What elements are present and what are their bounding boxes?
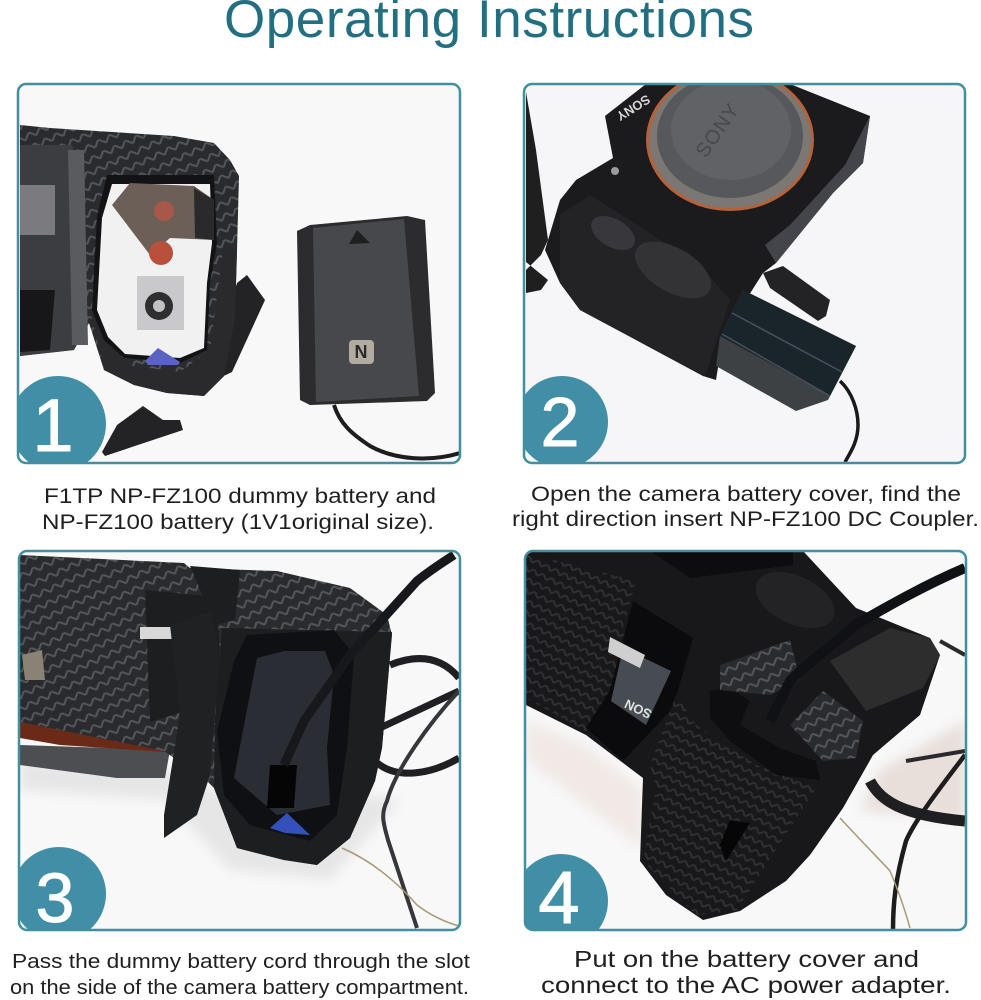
number badge 1 bbox=[19, 376, 106, 462]
cord bbox=[840, 381, 858, 462]
cord bbox=[770, 568, 965, 721]
strap bbox=[526, 92, 548, 293]
number badge 2: 2 bbox=[541, 383, 579, 461]
caption 1: F1TP NP-FZ100 dummy battery and bbox=[44, 485, 436, 508]
camera body bbox=[526, 551, 940, 920]
camera body bbox=[20, 555, 392, 865]
caption 2: right direction insert NP-FZ100 DC Coupler. bbox=[512, 508, 979, 531]
panel: step 3 bbox=[12, 551, 460, 941]
strap bbox=[375, 659, 459, 773]
open door bbox=[164, 611, 220, 838]
camera body: SON bbox=[622, 696, 654, 722]
dummy battery bbox=[297, 216, 435, 405]
camera body with open battery compartment bbox=[20, 125, 239, 396]
thread bbox=[840, 818, 910, 928]
caption 1: NP-FZ100 battery (1V1original size). bbox=[42, 511, 434, 534]
caption 1 bbox=[42, 485, 436, 534]
caption 2: Open the camera battery cover, find the bbox=[531, 483, 961, 506]
panel: step 2 bbox=[516, 69, 965, 468]
caption 4: Put on the battery cover and bbox=[574, 946, 919, 972]
battery coupler inserted bbox=[716, 266, 856, 411]
number badge 2 bbox=[525, 376, 608, 462]
battery cord bbox=[334, 405, 460, 458]
caption 2 bbox=[512, 483, 979, 531]
thick cord bbox=[284, 555, 454, 765]
number badge 4: 4 bbox=[538, 856, 580, 939]
caption 3 bbox=[10, 951, 470, 999]
camera strap bbox=[102, 275, 265, 456]
panel: step 1 bbox=[10, 84, 460, 472]
number badge 4 bbox=[526, 854, 608, 929]
panel: step 4 bbox=[514, 551, 966, 948]
dummy battery: N bbox=[354, 342, 368, 362]
camera: SONY bbox=[614, 92, 653, 124]
camera bbox=[545, 69, 870, 380]
second cord bbox=[383, 691, 459, 928]
caption 3: on the side of the camera battery compartment. bbox=[10, 977, 469, 999]
caption 3: Pass the dummy battery cord through the slot bbox=[12, 951, 470, 973]
caption 4: connect to the AC power adapter. bbox=[541, 972, 951, 998]
compartment bbox=[217, 630, 354, 841]
number badge 1: 1 bbox=[32, 384, 74, 467]
number badge 3: 3 bbox=[36, 859, 74, 937]
thread bbox=[342, 848, 459, 926]
camera: SONY bbox=[692, 99, 745, 162]
straps bbox=[870, 781, 965, 821]
number badge 3 bbox=[20, 847, 106, 929]
caption 4 bbox=[541, 946, 951, 998]
